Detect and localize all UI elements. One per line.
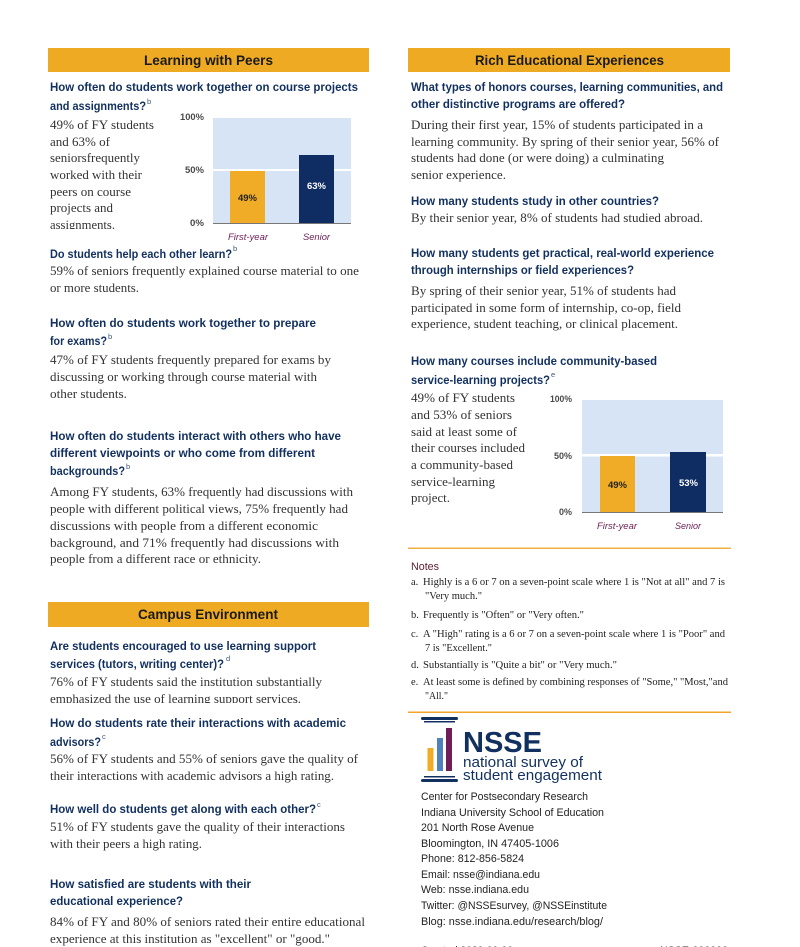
notes: "All." <box>425 691 448 702</box>
notes: b. <box>411 610 419 621</box>
question and finding: academic advisors: How do students rate their interactions with academic <box>50 716 346 730</box>
contact information <box>421 791 607 928</box>
text: course projects finding: projects and <box>50 201 114 215</box>
question: course projects: and assignments? <box>50 99 146 113</box>
section header: Learning with Peers <box>48 48 369 72</box>
notes: At least some is defined by combining responses of "Some," "Most,"and <box>423 677 729 688</box>
question and finding: get along with each other: c <box>317 800 321 809</box>
notes: 7 is "Excellent." <box>425 643 492 654</box>
contact information: Indiana University School of Education <box>421 807 604 819</box>
contact information: Web: nsse.indiana.edu <box>421 884 529 896</box>
text: service-learning finding: said at least some of <box>411 425 518 439</box>
question and finding: prepare for exams: discussing or working through course material with <box>50 370 318 384</box>
question and finding: get along with each other: with their peers a high rating. <box>50 837 202 851</box>
question and finding: distinctive programs: During their first year, 15% of students participated in a <box>411 118 703 132</box>
question: course projects: b <box>147 97 151 106</box>
question and finding: real-world experience <box>411 246 714 331</box>
question and finding: prepare for exams: other students. <box>50 387 127 401</box>
bar chart: service-learning: 50% <box>554 451 573 462</box>
text: service-learning finding: a community-based <box>411 458 514 472</box>
notes: e. <box>411 677 418 688</box>
text: course projects finding: peers on course <box>50 185 131 199</box>
question and finding: study abroad: How many students study in other countries? <box>411 194 659 208</box>
bar chart: service-learning: First-year <box>597 521 638 532</box>
notes: Highly is a 6 or 7 on a seven-point scale where 1 is "Not at all" and 7 is <box>423 577 725 588</box>
question and finding: different viewpoints: people from a different race or ethnicity. <box>50 552 261 566</box>
notes: Substantially is "Quite a bit" or "Very much." <box>423 660 617 671</box>
question and finding: different viewpoints: How often do students interact with others who have <box>50 429 341 443</box>
question: learning support services: d <box>226 654 230 663</box>
section header: Campus Environment: Campus Environment <box>138 606 278 622</box>
question and finding: real-world experience: experience, student teaching, or clinical placement. <box>411 317 678 331</box>
question: service-learning <box>411 354 657 387</box>
text: learning support finding <box>50 677 322 703</box>
notes: c. <box>411 629 418 640</box>
question: learning support services <box>50 639 316 671</box>
question and finding: academic advisors: their interactions with academic advisors a high rating. <box>50 769 334 783</box>
text: service-learning finding: project. <box>411 491 450 505</box>
question and finding: real-world experience: How many students get practical, real-world experience <box>411 246 714 260</box>
question and finding: prepare for exams: 47% of FY students frequently prepared for exams by <box>50 353 332 367</box>
question and finding: educational experience: How satisfied are students with their <box>50 877 251 891</box>
text: course projects finding: seniorsfrequently <box>50 151 141 165</box>
question and finding: study abroad: By their senior year, 8% of students had studied abroad. <box>411 211 703 225</box>
notes: Frequently is "Often" or "Very often." <box>423 610 584 621</box>
question and finding: academic advisors: c <box>102 732 106 741</box>
logo: NSSE: NSSE <box>463 727 542 759</box>
question and finding: prepare for exams <box>50 316 332 401</box>
question and finding: real-world experience: participated in some form of internship, co-op, field <box>411 301 682 315</box>
question and finding: study abroad <box>411 194 703 225</box>
question and finding: different viewpoints <box>50 429 354 566</box>
question and finding: help each other learn <box>50 244 359 295</box>
bar chart: service-learning: Senior <box>675 521 702 532</box>
notes: A "High" rating is a 6 or 7 on a seven-point scale where 1 is "Poor" and <box>423 629 726 640</box>
section header: Rich Educational Experiences <box>408 48 730 72</box>
bar chart: service-learning: 0% <box>559 507 573 518</box>
question: service-learning: service-learning projects? <box>411 373 550 387</box>
bar chart: service-learning <box>550 394 723 532</box>
bar chart: course projects <box>180 112 351 243</box>
text: service-learning finding <box>411 391 526 505</box>
contact information: Phone: 812-856-5824 <box>421 853 524 865</box>
question and finding: help each other learn: Do students help each other learn? <box>50 247 232 261</box>
question and finding: different viewpoints: discussions with people from a different economic <box>50 519 318 533</box>
contact information: Center for Postsecondary Research <box>421 791 588 803</box>
question and finding: educational experience: experience at this institution as "excellent" or "good." <box>50 932 330 946</box>
text: service-learning finding: and 53% of seniors <box>411 408 512 422</box>
bar chart: service-learning: 49% <box>608 480 628 491</box>
contact information: 201 North Rose Avenue <box>421 822 534 834</box>
logo: NSSE: national survey of <box>463 755 584 771</box>
text: course projects finding: 49% of FY students <box>50 118 154 132</box>
question and finding: academic advisors: 56% of FY students and 55% of seniors gave the quality of <box>50 752 359 766</box>
bar chart: course projects: First-year <box>228 232 269 243</box>
text: service-learning finding: their courses included <box>411 441 526 455</box>
bar chart: course projects: 63% <box>307 181 327 192</box>
panel: Rich Educational Experiences <box>408 48 730 532</box>
bar chart: course projects: 0% <box>190 218 205 229</box>
bar chart: service-learning: 53% <box>679 478 699 489</box>
text: course projects finding <box>50 118 154 232</box>
question and finding: help each other learn: b <box>233 244 237 253</box>
notes: d. <box>411 660 419 671</box>
question and finding: different viewpoints: background, and 71% frequently had discussions with <box>50 536 340 550</box>
question and finding: prepare for exams: b <box>108 332 112 341</box>
notes: "Very much." <box>425 591 482 602</box>
question and finding: educational experience: 84% of FY and 80% of seniors rated their entire educational <box>50 915 366 929</box>
contact information: Email: nsse@indiana.edu <box>421 869 540 881</box>
question and finding: educational experience: educational experience? <box>50 894 183 908</box>
question and finding: different viewpoints: backgrounds? <box>50 464 125 478</box>
text: course projects finding: and 63% of <box>50 135 111 149</box>
panel: Learning with Peers <box>48 48 369 566</box>
question and finding: real-world experience: through internships or field experiences? <box>411 263 634 277</box>
notes <box>411 561 729 702</box>
bar chart: service-learning: 100% <box>550 394 572 405</box>
question and finding: different viewpoints: Among FY students, 63% frequently had discussions with <box>50 485 354 499</box>
contact information: Bloomington, IN 47405-1006 <box>421 838 559 850</box>
question: service-learning: e <box>551 370 555 379</box>
bar chart: course projects: 100% <box>180 112 205 123</box>
bar chart: course projects: 50% <box>185 165 205 176</box>
panel: Campus Environment <box>48 602 369 946</box>
question: course projects <box>50 80 358 113</box>
question and finding: different viewpoints: b <box>126 462 130 471</box>
section header: Learning with Peers: Learning with Peers <box>144 52 273 68</box>
question and finding: distinctive programs: other distinctive programs are offered? <box>411 97 625 111</box>
question and finding: get along with each other <box>50 800 345 851</box>
question and finding: academic advisors <box>50 716 359 783</box>
question and finding: prepare for exams: How often do students work together to prepare <box>50 316 316 330</box>
question and finding: different viewpoints: people with different political views, 75% frequently had <box>50 502 349 516</box>
question and finding: get along with each other: How well do students get along with each other? <box>50 802 316 816</box>
question and finding: help each other learn: 59% of seniors frequently explained course material to one <box>50 264 359 278</box>
logo: NSSE <box>421 717 602 784</box>
question and finding: distinctive programs: learning community. By spring of their senior year, 56% of <box>411 135 720 149</box>
text: service-learning finding: service-learning <box>411 475 496 489</box>
section header: Rich Educational Experiences: Rich Educational Experiences <box>475 52 664 68</box>
question: course projects: How often do students work together on course projects <box>50 80 358 94</box>
section header: Campus Environment <box>48 602 369 627</box>
question and finding: educational experience <box>50 877 366 946</box>
question and finding: distinctive programs: students had done (or were doing) a culminating <box>411 151 665 165</box>
text: learning support finding: emphasized the use of learning support services. <box>50 692 301 706</box>
bar chart: course projects: Senior <box>303 232 331 243</box>
text: service-learning finding: 49% of FY students <box>411 391 515 405</box>
question and finding: distinctive programs <box>411 80 723 182</box>
text: course projects finding: worked with their <box>50 168 143 182</box>
footer: clipped page reference <box>423 946 726 947</box>
question and finding: get along with each other: 51% of FY students gave the quality of their interactions <box>50 820 345 834</box>
contact information: Twitter: @NSSEsurvey, @NSSEinstitute <box>421 900 607 912</box>
bar chart: course projects: 49% <box>238 193 258 204</box>
text: learning support finding: 76% of FY students said the institution substantially <box>50 675 323 689</box>
notes: Notes <box>411 561 439 573</box>
question and finding: real-world experience: By spring of their senior year, 51% of students had <box>411 284 677 298</box>
question: service-learning: How many courses include community-based <box>411 354 657 368</box>
question and finding: academic advisors: advisors? <box>50 735 101 749</box>
question: learning support services: Are students encouraged to use learning support <box>50 639 316 653</box>
question and finding: prepare for exams: for exams? <box>50 334 107 348</box>
question and finding: distinctive programs: What types of honors courses, learning communities, and <box>411 80 723 94</box>
question: learning support services: services (tutors, writing center)? <box>50 657 224 671</box>
question and finding: distinctive programs: senior experience. <box>411 168 506 182</box>
question and finding: help each other learn: or more students. <box>50 281 139 295</box>
question and finding: different viewpoints: different viewpoints or who come from different <box>50 446 315 460</box>
notes: a. <box>411 577 418 588</box>
logo: NSSE: student engagement <box>463 768 602 784</box>
contact information: Blog: nsse.indiana.edu/research/blog/ <box>421 916 604 928</box>
text: course projects finding: assignments. <box>50 218 115 232</box>
